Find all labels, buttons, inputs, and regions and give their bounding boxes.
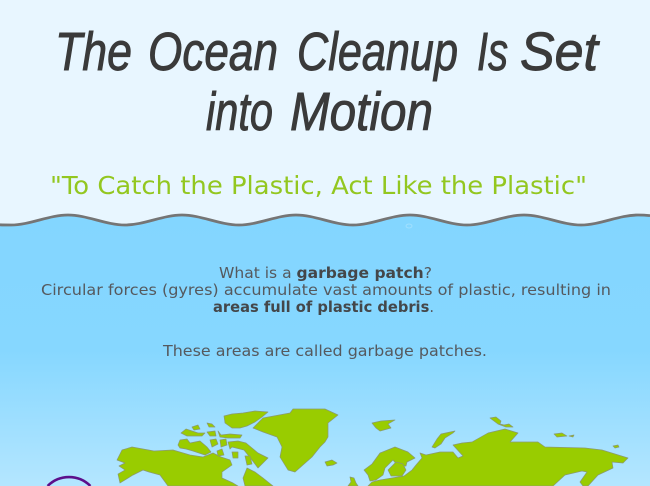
text block: garbage patch definition: What is a garbage patch ? <box>219 264 432 282</box>
title: Is <box>477 22 508 82</box>
Greenland <box>253 409 338 472</box>
title: Cleanup <box>297 22 458 82</box>
Great Britain <box>348 477 358 486</box>
title <box>55 22 600 142</box>
New Siberian Islands <box>554 433 567 437</box>
text block: garbage patches note: These areas are called garbage patches. <box>162 342 487 360</box>
title: Motion <box>290 82 433 142</box>
Svalbard <box>372 420 395 431</box>
text block: garbage patch definition: Circular forces (gyres) accumulate vast amounts of plastic, resulting in <box>41 281 611 299</box>
bubble <box>406 224 412 228</box>
North America mainland <box>117 447 238 486</box>
ocean with wavy surface <box>0 215 650 486</box>
world map <box>117 409 628 486</box>
Franz Josef Land <box>490 417 513 427</box>
title: into <box>206 82 273 142</box>
title: Ocean <box>148 22 278 82</box>
text block: garbage patch definition: areas full of plastic debris. <box>213 298 434 316</box>
Arctic islands <box>178 439 211 455</box>
sky background <box>0 0 650 240</box>
Quebec and Labrador <box>243 468 273 486</box>
gyre circle marker <box>48 477 90 486</box>
title: The <box>55 22 132 82</box>
Eurasia mainland <box>368 429 628 486</box>
Novaya Zemlya <box>432 431 455 448</box>
Iceland <box>325 460 337 466</box>
Finland <box>388 462 406 476</box>
title: Set <box>520 22 600 82</box>
Wrangel Island <box>613 445 619 448</box>
text block: garbage patch definition <box>41 264 611 316</box>
wave line <box>0 215 650 225</box>
subtitle: "To Catch the Plastic, Act Like the Plastic" <box>50 171 587 200</box>
Scandinavia <box>364 447 415 481</box>
